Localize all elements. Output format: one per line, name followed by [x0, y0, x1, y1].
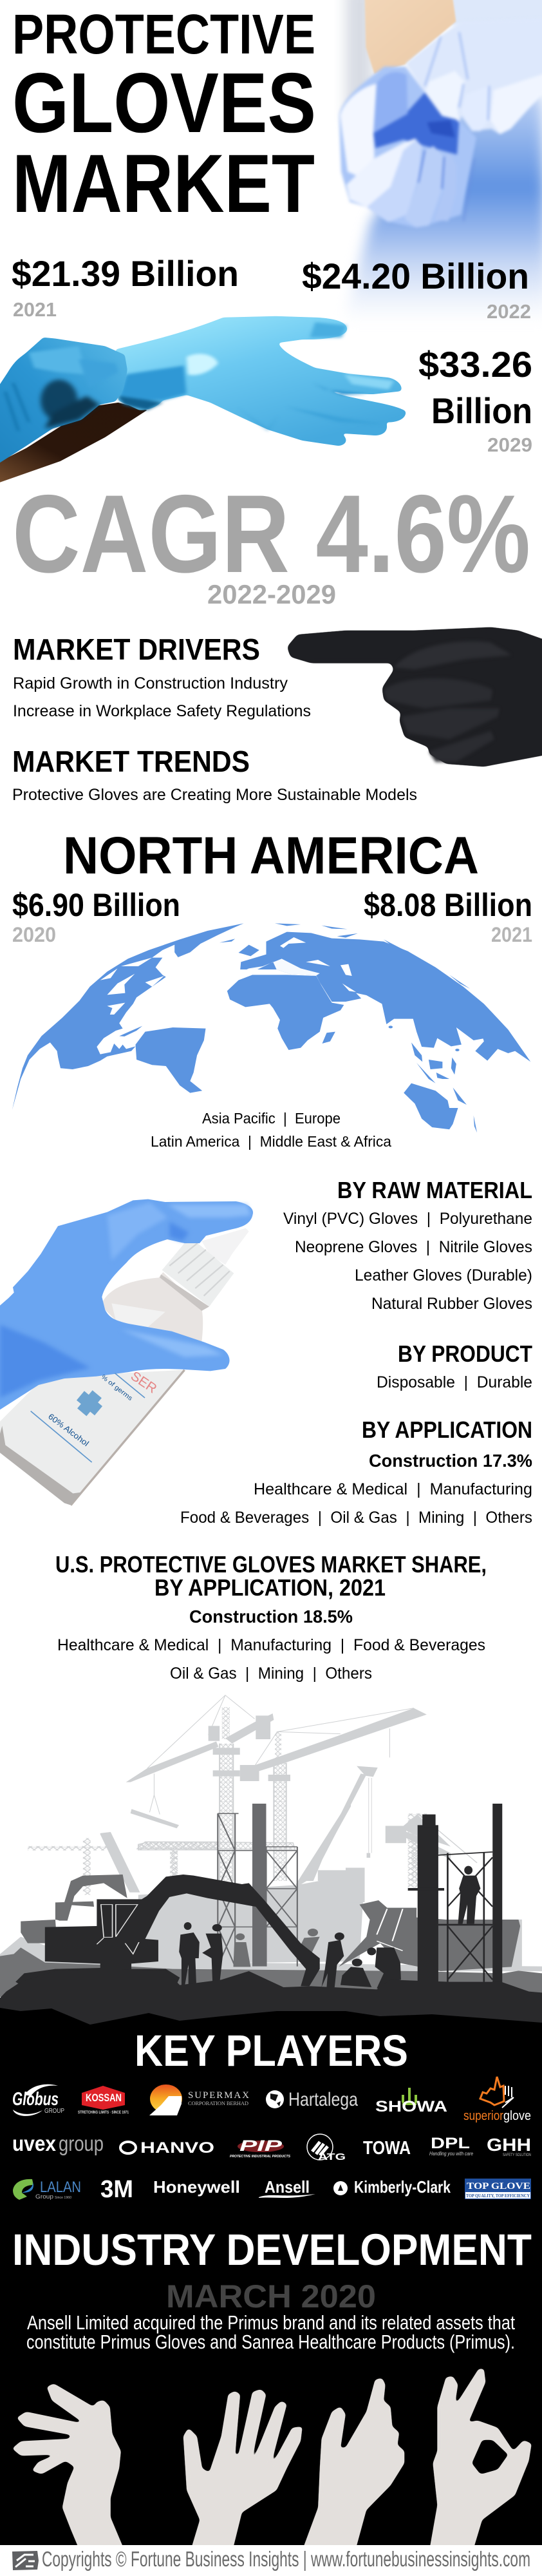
- bottle label text: SER: [128, 1368, 160, 1397]
- grey ground: [0, 1947, 542, 1997]
- logo: Supermax: CORPORATION BERHAD: [188, 2100, 248, 2106]
- light background building: [0, 1804, 542, 1971]
- market drivers: Increase in Workplace Safety Regulations: [13, 702, 311, 720]
- logo: DPL: DPL: [431, 2135, 470, 2152]
- stat: 2022 market size: [302, 256, 531, 323]
- segment: by product: [377, 1340, 532, 1391]
- logo: uvex group: [12, 2132, 104, 2155]
- foreground columns and scaffold: [408, 1804, 502, 1984]
- logo: PIP: [230, 2137, 290, 2159]
- grey background excavator: [21, 1875, 127, 1943]
- bottle label text: % of germs: [100, 1373, 134, 1402]
- title: PROTECTIVE: [12, 3, 315, 66]
- logo: Kimberly-Clark: Kimberly-Clark: [354, 2177, 451, 2197]
- segment: by raw material: Natural Rubber Gloves: [371, 1295, 532, 1313]
- stat: 2029 market size: Billion: [431, 390, 532, 431]
- CAGR headline: 2022-2029: [207, 579, 336, 609]
- key players heading: KEY PLAYERS: [135, 2026, 408, 2075]
- logo: Supermax: SUPERMAX: [188, 2090, 249, 2101]
- market trends: Protective Gloves are Creating More Sustainable Models: [12, 786, 417, 804]
- image: arm pulling on blue nitrile glove: [0, 316, 406, 485]
- market drivers: [13, 633, 311, 720]
- glove hand 2: [183, 2389, 303, 2554]
- illustration: construction site foreground: [0, 1804, 542, 2027]
- segment: by product: Disposable | Durable: [377, 1373, 532, 1391]
- logo: Kossan: [78, 2086, 129, 2115]
- title: [12, 3, 316, 230]
- logo: DPL: [429, 2135, 473, 2157]
- logo: Kossan: STRETCHING LIMITS · SINCE 1971: [78, 2111, 129, 2115]
- logo: uvex group: group: [59, 2132, 104, 2155]
- excavator track highlights: [66, 1974, 171, 1982]
- title: MARKET: [12, 138, 315, 230]
- excavator: [15, 1875, 320, 1986]
- logo: Globus Group: Globus: [12, 2089, 59, 2110]
- title: GLOVES: [12, 55, 316, 150]
- dark ground: [0, 1969, 542, 2027]
- stat: 2029 market size: $33.26: [418, 344, 532, 385]
- segment: by raw material: Leather Gloves (Durable): [355, 1266, 532, 1284]
- glove hand 4: [429, 2369, 532, 2554]
- bottle label text: [46, 1368, 160, 1448]
- grey background workers: [233, 1929, 320, 1967]
- workers: [179, 1866, 480, 1989]
- logo: Supermax: [149, 2085, 249, 2115]
- logo: Top Glove: TOP GLOVE: [467, 2181, 530, 2191]
- logo: DPL: Handling you with care: [429, 2151, 473, 2157]
- logo: Kossan: KOSSAN: [86, 2092, 122, 2104]
- logo: Hanvo: [120, 2139, 214, 2157]
- stat: North America 2021: 2021: [491, 923, 532, 946]
- stat: North America 2020: 2020: [12, 923, 56, 946]
- world map dome: [12, 923, 530, 1132]
- logo: GHH: SAFETY SOLUTION: [503, 2153, 531, 2157]
- stat: North America 2020: $6.90 Billion: [12, 887, 180, 923]
- image: four white gloved hands: [12, 2369, 532, 2554]
- footer: [0, 2545, 542, 2576]
- logo: Superior Glove: glove: [503, 2109, 531, 2123]
- logo: Globus Group: [12, 2085, 64, 2116]
- footer logo: [12, 2551, 39, 2570]
- logo: GHH: GHH: [487, 2135, 531, 2155]
- stat: 2022 market size: 2022: [487, 300, 531, 323]
- development description: [26, 2311, 515, 2353]
- stat: 2029 market size: [418, 344, 532, 456]
- logo: Hanvo: HANVO: [140, 2139, 214, 2157]
- logo: uvex group: uvex: [12, 2132, 57, 2155]
- stat: 2022 market size: $24.20 Billion: [302, 256, 529, 296]
- logo: Lalan Group: Group: [35, 2193, 53, 2200]
- U.S. market share: Healthcare & Medical | Manufacturing | Food & Beverages: [57, 1636, 485, 1654]
- other regions list: Asia Pacific | Europe: [202, 1110, 341, 1127]
- region heading: North America: NORTH AMERICA: [63, 826, 479, 885]
- image: black gloved hand pointing left: [287, 627, 542, 767]
- logo: 3M: 3M: [100, 2176, 133, 2203]
- mid grey scaffold and column: [218, 1804, 297, 1967]
- U.S. market share: Oil & Gas | Mining | Others: [170, 1665, 372, 1683]
- grey dump truck: [339, 1900, 520, 1971]
- dark panel: [0, 2008, 542, 2545]
- stat: 2021 market size: [12, 253, 239, 321]
- segment: by application: Healthcare & Medical | Manufacturing: [254, 1480, 532, 1498]
- logo: Towa: TOWA: [363, 2138, 411, 2159]
- logo: Hartalega: [266, 2089, 358, 2110]
- segment: by application: Construction 17.3%: [369, 1451, 532, 1471]
- logo: Superior Glove: [463, 2077, 531, 2123]
- stat: North America 2021: [364, 887, 532, 946]
- other regions list: Latin America | Middle East & Africa: [151, 1133, 391, 1150]
- U.S. market share: Construction 18.5%: [189, 1607, 353, 1627]
- logo: PIP: PROTECTIVE INDUSTRIAL PRODUCTS: [230, 2155, 290, 2159]
- logo: Ansell: Ansell: [265, 2177, 310, 2197]
- illustration: background cranes: [100, 1695, 451, 1882]
- logo: Lalan Group: [13, 2179, 81, 2200]
- logo: Top Glove: [465, 2179, 531, 2199]
- logo: Globus Group: GROUP: [44, 2108, 64, 2115]
- stat: North America 2020: [12, 887, 180, 946]
- segment: by raw material: [283, 1177, 532, 1313]
- bottle label text: 60% Alcohol: [46, 1412, 91, 1448]
- glove hand 1: [12, 2383, 126, 2554]
- logo: Lalan Group: Since 1960: [55, 2196, 71, 2200]
- other regions list: [151, 1110, 391, 1150]
- market trends: MARKET TRENDS: [12, 745, 250, 778]
- segment: by raw material: Vinyl (PVC) Gloves | Polyurethane: [283, 1210, 532, 1228]
- logo: Showa: SHOWA: [375, 2098, 447, 2115]
- logo: Superior Glove: superior: [463, 2109, 503, 2123]
- logo: Honeywell: Honeywell: [153, 2177, 240, 2197]
- photo: hands pulling on pale blue gloves: [339, 0, 542, 322]
- segment: by raw material: Neoprene Gloves | Nitrile Gloves: [295, 1238, 532, 1256]
- image: blue gloved hand holding sanitizer bottle: [0, 1199, 253, 1505]
- U.S. market share: [55, 1551, 487, 1683]
- segment: by application: [180, 1417, 532, 1527]
- glove hand 3: [301, 2378, 404, 2554]
- illustration: construction site background layers: [0, 1804, 542, 1971]
- logo: Kimberly-Clark: [333, 2177, 451, 2197]
- market drivers: MARKET DRIVERS: [13, 633, 260, 666]
- stat: 2029 market size: 2029: [487, 434, 532, 456]
- logo: Lalan Group: LALAN: [40, 2179, 81, 2196]
- logo: PIP: PIP: [239, 2137, 283, 2155]
- logo: Top Glove: TOP QUALITY, TOP EFFICIENCY: [466, 2193, 530, 2199]
- stat: 2021 market size: $21.39 Billion: [12, 253, 239, 294]
- date: March 2020: MARCH 2020: [166, 2278, 376, 2314]
- logo: ATG: [307, 2134, 346, 2162]
- market trends: [12, 745, 417, 804]
- logo: ATG: ATG: [318, 2151, 346, 2162]
- logo: Hartalega: Hartalega: [288, 2089, 358, 2110]
- market drivers: Rapid Growth in Construction Industry: [13, 674, 288, 692]
- stat: 2021 market size: 2021: [13, 298, 57, 321]
- segment: by application: Food & Beverages | Oil & Gas | Mining | Others: [180, 1509, 532, 1527]
- logo: Showa: [375, 2088, 447, 2115]
- excavator window lines: [97, 1905, 139, 1954]
- U.S. market share: BY APPLICATION, 2021: [154, 1574, 386, 1601]
- white truck details: [377, 1909, 403, 1951]
